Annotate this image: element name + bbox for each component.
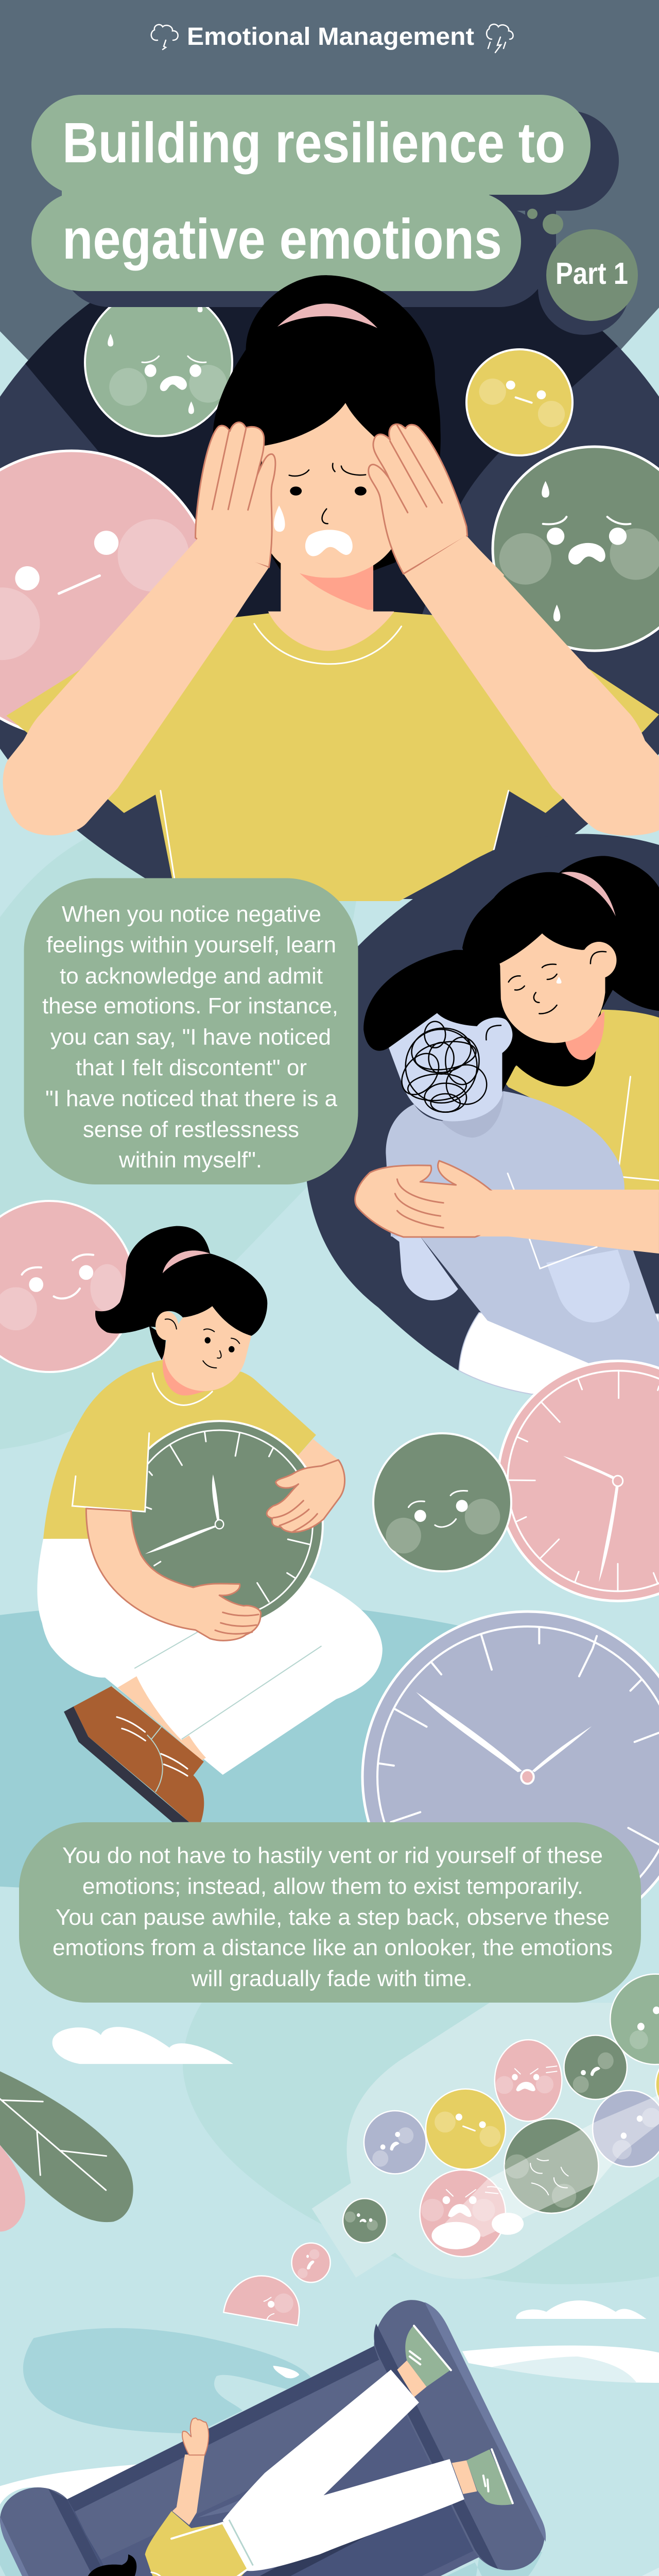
face (261, 403, 404, 578)
clock: lavender (362, 1612, 659, 1942)
yellow t-shirt lying (145, 2511, 248, 2576)
facial features (274, 463, 367, 556)
scribble of tangled thoughts (395, 1022, 487, 1112)
paragraph 2: You can pause awhile, take a step back, observe these (56, 1905, 610, 1930)
bed deck (67, 2346, 479, 2576)
illustration: woman comforting her inner self (303, 834, 659, 1394)
ankle (118, 1676, 206, 1760)
illustration: woman covering her face (3, 275, 659, 901)
paragraph 1: "I have noticed that there is a (45, 1086, 338, 1111)
shoe lower (452, 2449, 514, 2505)
paragraph 1: these emotions. For instance, (42, 993, 338, 1019)
inner self: head (389, 1013, 512, 1122)
hair (213, 275, 441, 570)
trousers (37, 1539, 383, 1775)
bubble: pink large (420, 2170, 506, 2257)
face (164, 1306, 251, 1391)
bubble: lavender right (593, 2091, 659, 2167)
raised arm (172, 2454, 205, 2525)
upper hand (267, 1460, 345, 1532)
icon: cloud (151, 25, 178, 49)
raised hand (182, 2418, 209, 2455)
paragraph 1: sense of restlessness (83, 1117, 299, 1142)
left hand (160, 422, 275, 617)
paragraph 2: will gradually fade with time. (191, 1966, 473, 1991)
foam (431, 2213, 524, 2249)
header: topic line (151, 23, 513, 53)
wave behind the seated woman (0, 1602, 505, 1909)
carer's neck shadow (565, 1011, 604, 1060)
wave: white (462, 2346, 659, 2383)
title bubble (31, 95, 591, 291)
carer's hair (462, 856, 659, 1091)
header text: Emotional Management (187, 23, 474, 50)
paragraph 2: emotions from a distance like an onlooker, the emotions (53, 1935, 613, 1960)
bubble: pink angry (495, 2040, 562, 2121)
inner self: hair (363, 950, 502, 1087)
paragraph 1: within myself". (118, 1147, 262, 1173)
carer's yellow shirt (500, 1010, 659, 1192)
bubble: green (610, 1974, 659, 2064)
scene: emotions drifting (0, 1974, 659, 2433)
pool (23, 2328, 311, 2433)
part label: Part 1 (556, 257, 628, 291)
hair lying (86, 2554, 148, 2576)
paragraph 1: feelings within yourself, learn (46, 933, 336, 957)
carer's forearm and clasped hands (475, 1190, 659, 1253)
paragraph 2: You do not have to hastily vent or rid yourself of these (62, 1843, 603, 1868)
bubble faces (223, 1974, 659, 2326)
inner self: body (386, 1091, 659, 1393)
neck (281, 560, 373, 615)
water blobs (183, 2003, 659, 2284)
white trousers (459, 1313, 659, 1394)
paragraph 2: emotions; instead, allow them to exist temporarily. (82, 1874, 583, 1899)
title bubble shadow (60, 111, 630, 335)
trousers lying (223, 2369, 464, 2571)
face: yellow flat (466, 349, 573, 455)
bubble: dark green (564, 2036, 627, 2099)
illustration: woman hugging a clock (37, 1226, 383, 1822)
hair (95, 1226, 267, 1336)
brown shoe (64, 1686, 204, 1822)
cloud small (516, 2300, 646, 2319)
upper hand arm behind clock (294, 1439, 345, 1520)
yellow t-shirt (6, 612, 659, 901)
hero backdrop: dark circle (0, 223, 659, 899)
sleeve (43, 1413, 149, 1539)
lower arm and hand (86, 1509, 261, 1640)
bubble: dark green large (505, 2119, 598, 2213)
floating bed with woman (0, 2300, 659, 2576)
face: green crying (85, 289, 232, 436)
clock: dark green (116, 1421, 323, 1628)
decorative thought dots and part badge (527, 209, 638, 321)
title: negative emotions (62, 208, 502, 271)
bed right bolster (374, 2300, 546, 2570)
water waves around bed (0, 2464, 659, 2576)
bed left bolster (0, 2487, 172, 2576)
bubble: yellow right (655, 2050, 659, 2119)
title (62, 111, 628, 291)
bubble: lavender (364, 2111, 426, 2174)
bubble: dark green small (343, 2198, 387, 2243)
right arm (387, 531, 659, 836)
icon: storm cloud (487, 24, 513, 53)
title: Building resilience to (62, 111, 565, 175)
headband (278, 303, 377, 328)
translucent hand overlay (439, 2095, 659, 2237)
paragraph 1: you can say, "I have noticed (50, 1024, 331, 1050)
right hand (369, 424, 505, 622)
paragraph 1 (24, 878, 358, 1184)
neck shadow (163, 1349, 206, 1396)
t-shirt (43, 1360, 316, 1539)
bubble: pink half sunk (223, 2276, 299, 2326)
paragraph 1: When you notice negative (62, 902, 321, 927)
paragraph 2 (19, 1822, 641, 2003)
carer's face (494, 934, 605, 1043)
bubble: pink small (292, 2243, 331, 2282)
face: pink smiling (0, 1201, 135, 1372)
left arm (3, 517, 273, 836)
face: dark green crying (493, 447, 659, 651)
bubble: yellow (426, 2089, 506, 2170)
cloud (53, 2027, 233, 2064)
dark backdrop (303, 834, 659, 1370)
plant leaf (0, 2071, 133, 2232)
paragraph 1: that I felt discontent" or (76, 1055, 307, 1080)
shoe upper (397, 2325, 451, 2397)
emotion faces around the hero (0, 289, 659, 737)
paragraph 1: to acknowledge and admit (60, 963, 323, 989)
face: pink flat (0, 451, 215, 737)
face: dark green smiling (373, 1433, 511, 1571)
clock: pink (498, 1361, 659, 1601)
